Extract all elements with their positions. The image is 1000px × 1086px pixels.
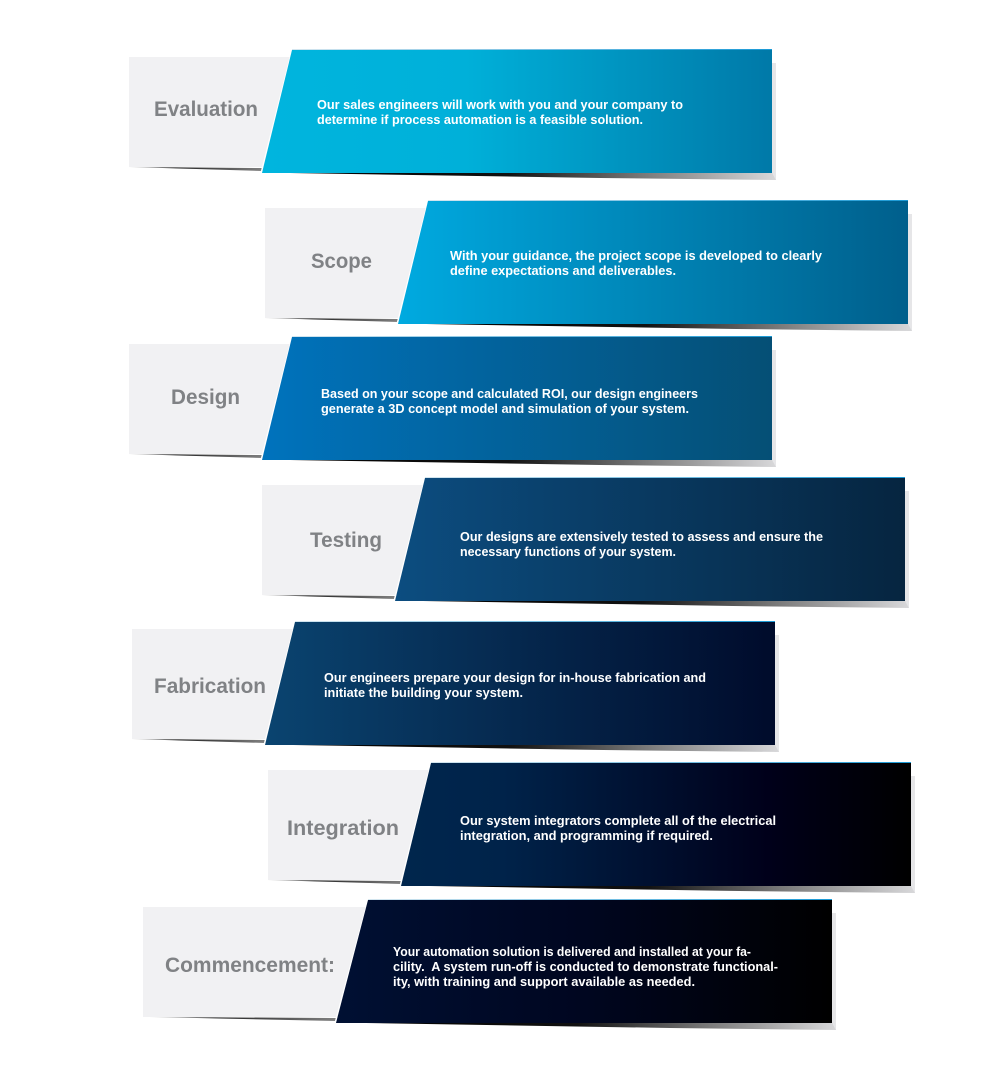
description: generate a 3D concept model and simulation of your system. (321, 402, 689, 416)
shadows (268, 776, 915, 893)
description (324, 671, 706, 700)
description: Your automation solution is delivered and installed at your fa- (393, 945, 751, 959)
step: Integration (268, 762, 915, 893)
shadows (150, 913, 836, 1030)
step: Commencement (143, 899, 836, 1030)
label panel (265, 208, 435, 318)
heading: Testing (310, 529, 382, 552)
shadows (265, 214, 912, 331)
description (317, 98, 683, 127)
step: Evaluation (129, 49, 776, 180)
description: Based on your scope and calculated ROI, our design engineers (321, 387, 698, 401)
label panel (143, 907, 373, 1017)
description: cility. A system run-off is conducted to demonstrate functional- (393, 960, 778, 974)
step: Testing (262, 477, 909, 608)
shadows (132, 635, 779, 752)
description (460, 814, 776, 843)
heading: Commencement: (165, 954, 335, 977)
description (321, 387, 698, 416)
description: determine if process automation is a feasible solution. (317, 113, 643, 127)
description panel (395, 478, 905, 601)
description: initiate the building your system. (324, 686, 523, 700)
description: integration, and programming if required. (460, 829, 713, 843)
description: necessary functions of your system. (460, 545, 676, 559)
label panel (129, 57, 299, 167)
description: ity, with training and support available as needed. (393, 975, 695, 989)
shadows (129, 350, 776, 467)
heading: Evaluation (154, 98, 258, 121)
heading: Scope (311, 250, 372, 273)
description: Our sales engineers will work with you and your company to (317, 98, 683, 112)
label panel (268, 770, 438, 880)
shadows (262, 491, 909, 608)
description: Our engineers prepare your design for in-house fabrication and (324, 671, 706, 685)
label panel (132, 629, 302, 739)
step: Design (129, 336, 776, 467)
label panel (129, 344, 299, 454)
step: Fabrication (132, 621, 779, 752)
description: define expectations and deliverables. (450, 264, 676, 278)
description (460, 530, 823, 559)
step: Scope (265, 200, 912, 331)
description panel (262, 50, 772, 173)
description (450, 249, 822, 278)
description panel (401, 763, 911, 886)
heading: Integration (287, 817, 399, 840)
description panel (336, 900, 832, 1023)
heading: Fabrication (154, 675, 266, 698)
label panel (262, 485, 432, 595)
description panel (265, 622, 775, 745)
description: Our designs are extensively tested to assess and ensure the (460, 530, 823, 544)
description panel (398, 201, 908, 324)
description: With your guidance, the project scope is developed to clearly (450, 249, 822, 263)
description (393, 945, 778, 989)
shadows (129, 63, 776, 180)
description panel (262, 337, 772, 460)
description: Our system integrators complete all of the electrical (460, 814, 776, 828)
heading: Design (171, 386, 240, 409)
